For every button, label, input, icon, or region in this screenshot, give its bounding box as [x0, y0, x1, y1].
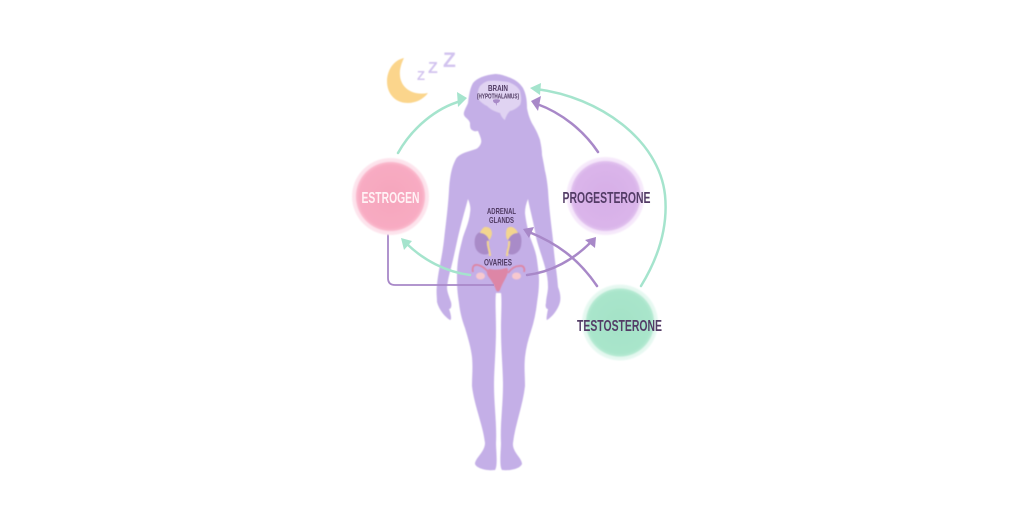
label: ovaries: OVARIES: [484, 258, 512, 268]
icon: sleeping Z letters: Z: [443, 49, 456, 72]
brain region: [477, 81, 521, 120]
organ: kidneys and adrenal glands: [475, 227, 521, 256]
body silhouette: [437, 74, 560, 470]
label: adrenal glands: ADRENAL: [487, 206, 516, 216]
icon: hypothalamus: [493, 99, 500, 106]
arrow: progesterone to brain: [531, 96, 598, 152]
icon: sleeping Z letters: Z: [417, 68, 425, 83]
icon: sleeping Z letters: Z: [428, 60, 438, 77]
panel: estrogen: [352, 158, 430, 236]
arrow: estrogen to uterus: [388, 234, 494, 285]
label: progesterone: PROGESTERONE: [562, 190, 650, 207]
label: hypothalamus: (HYPOTHALAMUS): [477, 94, 519, 100]
icon: sleeping Z letters: [417, 49, 456, 83]
arrow: ovaries to progesterone: [527, 237, 596, 275]
label: testosterone: TESTOSTERONE: [577, 318, 662, 335]
label: adrenal glands: GLANDS: [489, 215, 514, 225]
arrow: estrogen to brain: [398, 92, 467, 153]
label: estrogen: ESTROGEN: [362, 190, 420, 207]
arrow: ovaries to estrogen: [401, 238, 470, 275]
panel: progesterone: [562, 156, 650, 236]
icon: crescent moon: [387, 58, 428, 103]
label: brain: BRAIN: [488, 84, 508, 93]
panel: testosterone: [577, 284, 662, 361]
organ: uterus and ovaries: [473, 265, 524, 292]
label: adrenal glands: [487, 206, 516, 225]
arrow: testosterone to brain: [530, 83, 666, 286]
arrow: testosterone to adrenal glands: [523, 227, 597, 286]
